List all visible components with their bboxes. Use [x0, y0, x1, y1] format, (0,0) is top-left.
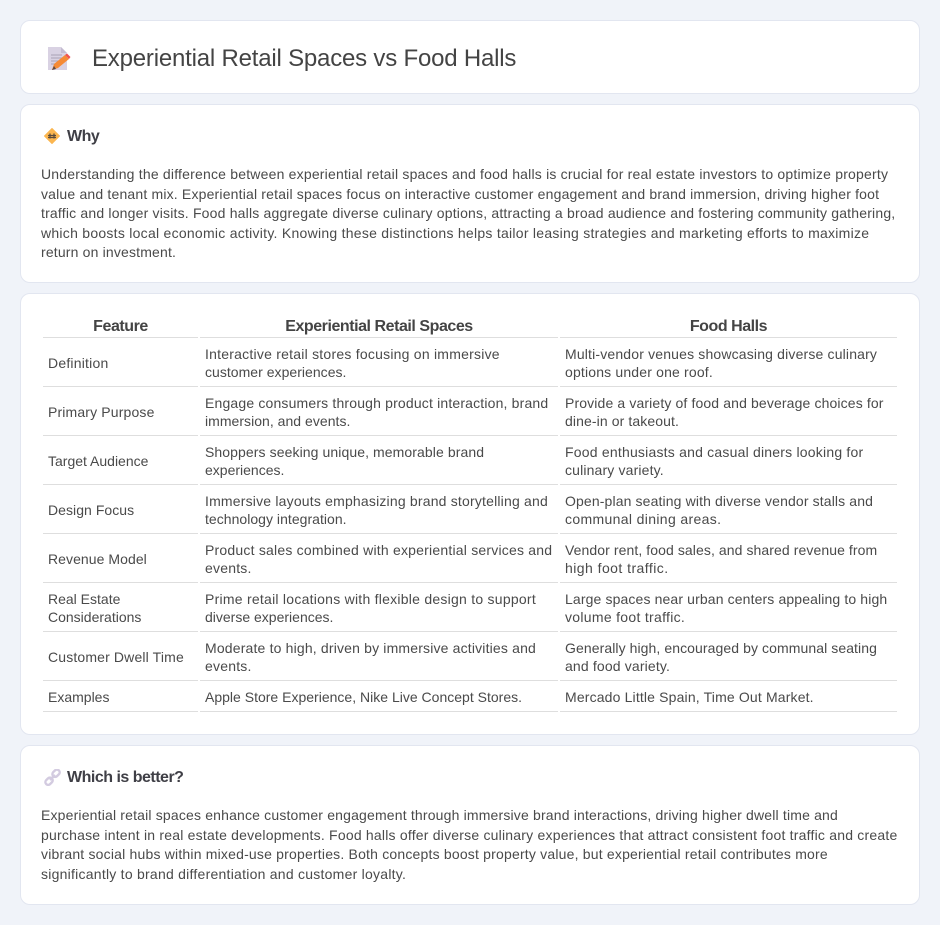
row: revenue model: high foot traffic. — [565, 560, 669, 576]
text block: why — [41, 166, 895, 260]
row: revenue model: Vendor rent, food sales, and shared revenue from — [565, 542, 877, 558]
table header: experiential retail spaces: Experiential Retail Spaces — [285, 318, 473, 335]
icon: document with pencil — [48, 47, 70, 70]
row: customer dwell time: Generally high, encouraged by communal seating — [565, 640, 877, 656]
row: examples — [48, 689, 814, 705]
row: target audience: Food enthusiasts and casual diners looking for — [565, 444, 863, 460]
row: design focus: Immersive layouts emphasizing brand storytelling and — [205, 493, 548, 509]
row: definition — [48, 346, 877, 380]
row: revenue model: events. — [205, 560, 252, 576]
row: customer dwell time: Customer Dwell Time — [48, 649, 184, 665]
row: target audience: Shoppers seeking unique, memorable brand — [205, 444, 484, 460]
row: target audience — [48, 444, 863, 478]
row: primary purpose: Provide a variety of food and beverage choices for — [565, 395, 884, 411]
table header: food halls: Food Halls — [690, 318, 767, 335]
row: real estate considerations: Large spaces near urban centers appealing to high — [565, 591, 887, 607]
row: customer dwell time: Moderate to high, driven by immersive activities and — [205, 640, 536, 656]
icon: warning diamond — [44, 128, 60, 144]
row: target audience: culinary variety. — [565, 462, 664, 478]
row: definition: Definition — [48, 355, 108, 371]
text block: which is better: vibrant social hubs within mixed-use properties. Both concepts boost property value, but experiential retail contributes more — [41, 846, 828, 862]
row: target audience: Target Audience — [48, 453, 148, 469]
row: target audience: experiences. — [205, 462, 284, 478]
row: definition: customer experiences. — [205, 364, 346, 380]
text block: why: traffic and longer visits. Food halls aggregate diverse culinary options, attracting a broad audience and fostering community gathering, — [41, 205, 895, 221]
row: customer dwell time — [48, 640, 877, 674]
text block: why: which boosts local economic activity. Knowing these distinctions helps tailor leasing strategies and marketing efforts to maximize — [41, 224, 869, 240]
row: definition: Multi-vendor venues showcasing diverse culinary — [565, 346, 877, 362]
row: examples: Apple Store Experience, Nike Live Concept Stores. — [205, 689, 522, 705]
row: real estate considerations: volume foot traffic. — [565, 609, 685, 625]
text block: which is better — [41, 807, 897, 882]
text block: which is better: purchase intent in real estate developments. Food halls offer diverse culinary experiences that attract consistent foot traffic and create — [41, 826, 897, 842]
panel: why — [20, 104, 920, 283]
row: customer dwell time: events. — [205, 658, 252, 674]
icon: chain link — [44, 769, 61, 786]
row: real estate considerations: diverse experiences. — [205, 609, 333, 625]
row: revenue model — [48, 542, 877, 576]
row: customer dwell time: and food variety. — [565, 658, 670, 674]
row: real estate considerations: Prime retail locations with flexible design to support — [205, 591, 536, 607]
row: design focus: Open-plan seating with diverse vendor stalls and — [565, 493, 873, 509]
row: real estate considerations: Considerations — [48, 609, 141, 625]
row: real estate considerations: Real Estate — [48, 591, 120, 607]
row: design focus — [48, 493, 873, 527]
row: primary purpose — [48, 395, 884, 429]
panel: which is better — [20, 745, 920, 905]
heading: why: Why — [67, 128, 99, 145]
text block: why: return on investment. — [41, 244, 176, 260]
row: revenue model: Product sales combined with experiential services and — [205, 542, 552, 558]
table header: feature: Feature — [93, 318, 148, 335]
text block: why: Understanding the difference between experiential retail spaces and food halls is crucial for real estate investors to optimize property — [41, 166, 888, 182]
row: examples: Examples — [48, 689, 109, 705]
row: primary purpose: Primary Purpose — [48, 404, 155, 420]
row: design focus: communal dining areas. — [565, 511, 721, 527]
heading: which is better: Which is better? — [67, 769, 183, 786]
panel: comparison table — [20, 293, 920, 735]
row: definition: Interactive retail stores focusing on immersive — [205, 346, 500, 362]
row: definition: options under one roof. — [565, 364, 713, 380]
row: primary purpose: Engage consumers through product interaction, brand — [205, 395, 548, 411]
title: Experiential Retail Spaces vs Food Halls — [92, 45, 516, 72]
row: examples: Mercado Little Spain, Time Out Market. — [565, 689, 814, 705]
text block: which is better: Experiential retail spaces enhance customer engagement through immersive brand interactions, driving higher dwell time and — [41, 807, 838, 823]
panel: header — [20, 20, 920, 94]
row: design focus: technology integration. — [205, 511, 347, 527]
row: primary purpose: immersion, and events. — [205, 413, 350, 429]
text block: why: value and tenant mix. Experiential retail spaces focus on interactive customer engagement and brand immersion, driving higher foot — [41, 186, 879, 202]
row: real estate considerations — [48, 591, 887, 625]
row: primary purpose: dine-in or takeout. — [565, 413, 679, 429]
row: revenue model: Revenue Model — [48, 551, 147, 567]
row: design focus: Design Focus — [48, 502, 134, 518]
text block: which is better: significantly to brand differentiation and customer loyalty. — [41, 866, 406, 882]
